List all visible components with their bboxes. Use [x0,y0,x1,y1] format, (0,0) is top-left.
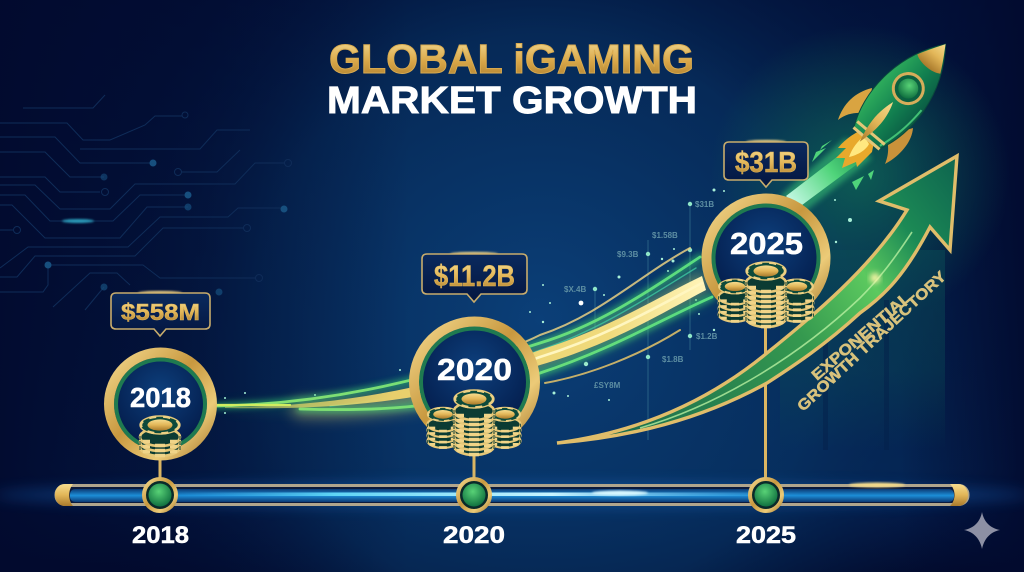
connector lines [160,320,766,482]
data point annotations: £SY8M [594,381,621,390]
timeline year labels: 2018 [132,522,189,549]
fins [838,88,872,120]
chip stack [427,390,521,455]
timeline year labels: 2020 [443,522,505,549]
exponential growth arrow [557,156,957,443]
icon: sparkle watermark [964,512,1000,549]
timeline node 2020 [458,479,490,511]
year ring [109,352,212,456]
value badge [724,140,808,187]
chip stack [140,416,180,456]
milestone 2025 [706,140,826,327]
arrow caption: GROWTH TRAJECTORY [794,268,950,415]
timeline node 2025 [750,479,782,511]
circuit pattern [0,95,292,310]
timeline bar [0,482,1024,507]
year ring: 2020 [437,352,512,387]
year ring [706,198,826,318]
data point annotations: $1.8B [662,355,684,364]
value badge [111,291,210,336]
chip stack [719,262,813,327]
timeline year labels: 2025 [736,522,796,549]
title line 2: MARKET GROWTH [327,80,697,122]
rocket exhaust beam [780,138,874,214]
data point annotations: $1.58B [652,231,678,240]
data point annotations: $9.3B [617,250,639,259]
timeline node 2018 [144,479,176,511]
body [842,27,966,161]
data point annotations: $X.4B [564,285,586,294]
value badge: $558M [121,299,200,325]
milestone 2018 [109,291,212,456]
arrow caption: EXPONENTIAL [808,289,914,384]
particles [224,188,852,414]
value badge [422,252,527,302]
timeline year labels [132,522,796,549]
value badge: $11.2B [434,260,515,293]
milestone 2020 [414,252,535,455]
growth light streams [217,248,712,411]
title line 1: GLOBAL iGAMING [329,36,694,82]
data point annotations [564,200,718,440]
year ring: 2018 [130,382,191,413]
title [327,36,697,122]
data point annotations: $31B [695,200,714,209]
year ring [414,322,535,442]
year ring: 2025 [730,226,803,261]
flame [836,128,874,168]
data point annotations: $1.2B [696,332,718,341]
rocket [836,27,966,168]
value badge: $31B [735,147,797,179]
